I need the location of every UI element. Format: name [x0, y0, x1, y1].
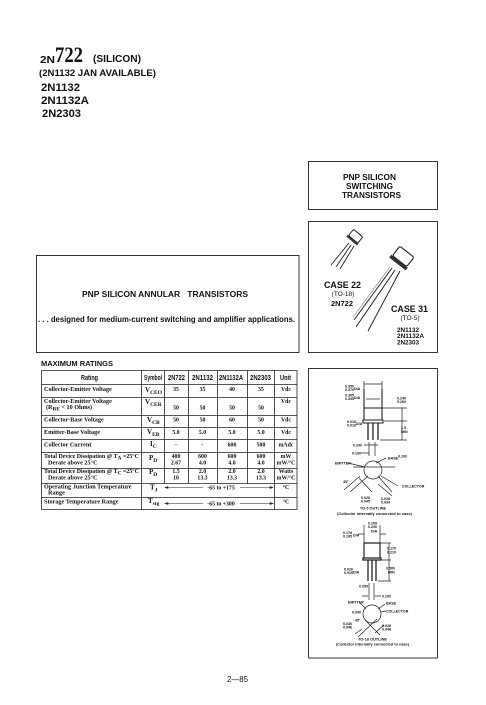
diagram: TO-5 outline: 0.019 — [347, 424, 356, 428]
row: collector-emitter voltage: V — [145, 386, 150, 394]
label: case 22: (TO-18) — [332, 291, 354, 298]
title: part numbers — [39, 42, 156, 120]
row: collector-emitter voltage RBE: 50 — [200, 406, 206, 412]
row: collector-emitter voltage RBE: 50 — [258, 406, 264, 412]
row: storage temperature range: stg — [153, 501, 160, 507]
row: device dissipation TC: =25°C — [122, 468, 139, 475]
label: case 22: CASE 22 — [324, 280, 361, 291]
row: collector current — [44, 440, 294, 450]
row: emitter-base voltage: Emitter-Base Voltage — [44, 429, 100, 436]
diagram: TO-18 outline: 0.036 — [343, 622, 352, 626]
diagram: TO-18 outline: 0.048 — [382, 628, 391, 632]
table header: 2N722 — [168, 375, 185, 382]
row: collector-base voltage: 60 — [229, 418, 235, 424]
page number: 2—85 — [227, 674, 248, 684]
diagram: TO-18 outline: 0.019 — [344, 571, 353, 575]
row: device dissipation TA: 600 — [228, 454, 236, 460]
row: collector-emitter voltage RBE — [44, 398, 291, 412]
panel: device description: . . . designed for medium-current switching and amplifier applications. — [38, 315, 295, 324]
row: emitter-base voltage: Vdc — [281, 430, 291, 436]
diagram: TO-18 outline: 0.040 — [352, 610, 361, 614]
table header: Symbol — [144, 375, 162, 382]
panel: device description: PNP SILICON ANNULAR TRANSISTORS — [82, 290, 248, 299]
label: case 31: CASE 31 — [391, 304, 429, 315]
panel: PNP silicon switching transistors: SWITCHING — [346, 182, 393, 191]
title: part numbers: 2N2303 — [42, 108, 81, 120]
row: device dissipation TA: D — [153, 458, 157, 464]
heading: maximum ratings: MAXIMUM RATINGS — [41, 361, 113, 368]
row: collector current: - — [202, 442, 204, 448]
label: case 31: 2N1132A — [397, 334, 425, 340]
row: operating junction temperature — [44, 484, 289, 496]
label: case 31 — [391, 304, 429, 346]
row: device dissipation TC: Total Device Dissipation @ T — [44, 469, 117, 475]
diagram: TO-18 outline: DIA — [371, 530, 378, 534]
diagram: TO-5 outline: COLLECTOR — [402, 484, 425, 488]
row: device dissipation TA: Derate above 25°C — [48, 460, 98, 466]
row: collector current: - — [175, 442, 177, 448]
label: case 31: 2N1132 — [397, 328, 420, 334]
row: device dissipation TA: P — [149, 454, 153, 462]
diagram: TO-5 outline: DIA — [354, 396, 361, 400]
diagram: TO-18 outline: 0.050 — [359, 584, 368, 588]
row: device dissipation TC — [44, 468, 295, 482]
row: operating junction temperature: -65 to +175 — [207, 486, 235, 492]
diagram: TO-18 outline: 45° — [355, 618, 361, 622]
caption: TO-5 outline — [337, 506, 413, 516]
row: collector-emitter voltage RBE: 50 — [173, 406, 179, 412]
row: device dissipation TC: 2.0 — [199, 469, 206, 475]
diagram: TO-5 outline: 0.240 — [397, 396, 406, 400]
table header: Rating — [81, 375, 98, 382]
row: collector-emitter voltage: Vdc — [281, 387, 291, 393]
diagram: TO-18 outline: MIN — [388, 570, 395, 574]
row: device dissipation TC: Watts — [279, 469, 294, 475]
table header: 2N1132 — [192, 375, 213, 382]
row: collector current: mAdc — [279, 442, 294, 448]
table header: 2N1132A — [219, 375, 243, 382]
row: collector-emitter voltage RBE: Vdc — [281, 399, 291, 405]
row: emitter-base voltage: 5.0 — [228, 430, 236, 436]
table grid — [42, 370, 297, 510]
row: emitter-base voltage: V — [147, 428, 152, 436]
diagram: TO-5 outline: 0.305 — [345, 394, 354, 398]
diagram: TO-5 outline: DIA — [354, 387, 361, 391]
title: part numbers: (SILICON) — [93, 54, 141, 65]
row: emitter-base voltage: 5.0 — [172, 430, 180, 436]
title: part numbers: 722 — [55, 42, 83, 67]
diagram: TO-5 outline: 45° — [343, 480, 349, 484]
diagram: TO-18 outline: BASE — [386, 602, 397, 606]
title: part numbers: (2N1132 JAN AVAILABLE) — [39, 68, 156, 79]
diagram: TO-5 outline: 0.028 — [381, 497, 390, 501]
diagram: TO-18 outline: 0.046 — [343, 626, 352, 630]
row: operating junction temperature: °C — [283, 484, 289, 491]
row: operating junction temperature: Operating Junction Temperature — [44, 484, 132, 490]
row: collector-base voltage: 50 — [258, 418, 264, 424]
row: collector-emitter voltage: 35 — [173, 387, 179, 393]
label: case 31: 2N2303 — [397, 340, 420, 346]
row: collector-base voltage: Vdc — [281, 418, 291, 424]
caption: TO-18 outline: (Collector internally connected to case) — [336, 642, 410, 646]
row: device dissipation TC: 2.0 — [228, 469, 236, 475]
row: collector-emitter voltage RBE: < 10 Ohms) — [60, 404, 92, 411]
row: emitter-base voltage: 5.0 — [199, 430, 206, 436]
diagram: TO-5 outline: 0.029 — [361, 496, 370, 500]
diagram: TO-5 outline: 0.016 — [347, 420, 356, 424]
row: operating junction temperature: J — [155, 488, 158, 494]
diagram: TO-5 outline: 0.100 — [352, 452, 361, 456]
diagram: TO-5 outline: DIA — [356, 422, 363, 426]
diagram: TO-5 outline: 0.200 — [353, 444, 362, 448]
row: collector-base voltage: CB — [152, 420, 160, 426]
row: collector-base voltage — [44, 416, 291, 426]
diagram: TO-18 outline: 0.178 — [343, 531, 352, 535]
label: case 22: 2N722 — [331, 301, 353, 308]
table header: 2N2303 — [250, 375, 271, 382]
panel: device description — [36, 256, 299, 352]
diagram: TO-18 outline: EMITTER — [348, 600, 364, 604]
label: case 22 — [324, 280, 361, 308]
row: collector current: I — [150, 440, 153, 448]
row: device dissipation TA — [44, 453, 295, 466]
diagram: TO-5 outline: 0.100 — [398, 454, 407, 458]
row: emitter-base voltage: 5.0 — [257, 430, 265, 436]
diagram: TO-18 outline: COLLECTOR — [386, 610, 409, 614]
caption: TO-18 outline: TO-18 OUTLINE — [358, 636, 387, 642]
row: device dissipation TA: 600 — [257, 454, 265, 460]
row: device dissipation TC: 10 — [173, 476, 179, 482]
diagram: TO-5 outline: 0.045 — [361, 500, 370, 504]
row: collector-emitter voltage — [44, 386, 291, 396]
diagram: TO-18 outline: 0.230 — [368, 525, 377, 529]
diagram: TO-18 outline: DIA — [353, 534, 360, 538]
diagram: TO-5 outline: MIN — [401, 430, 408, 434]
panel: outline drawings — [308, 368, 438, 658]
panel: PNP silicon switching transistors: PNP SILICON — [343, 173, 396, 182]
row: collector-emitter voltage: 40 — [229, 387, 235, 393]
row: collector-emitter voltage: CEO — [150, 390, 163, 396]
diagram: TO-5 outline: 1.5 — [401, 426, 406, 430]
diagram: TO-5 outline: EMITTER — [335, 462, 351, 466]
diagram: TO-18 outline — [336, 522, 410, 646]
row: device dissipation TC: 13.3 — [197, 476, 208, 482]
title: part numbers: 2N1132A — [41, 95, 89, 107]
row: device dissipation TC: mW/°C — [277, 474, 295, 482]
row: collector-emitter voltage RBE: CER — [150, 402, 163, 408]
diagram: TO-18 outline: 0.210 — [387, 550, 396, 554]
row: operating junction temperature: T — [150, 484, 155, 492]
row: device dissipation TC: 13.3 — [256, 476, 266, 482]
diagram: TO-5 outline: 0.034 — [381, 500, 390, 504]
title: part numbers: 2N1132 — [41, 82, 80, 94]
row: collector-emitter voltage: 35 — [258, 387, 264, 393]
row: storage temperature range: Storage Temperature Range — [44, 498, 119, 506]
row: storage temperature range: T — [148, 497, 153, 505]
diagram: TO-18 outline: 0.195 — [343, 534, 352, 538]
row: device dissipation TA: 4.0 — [228, 460, 236, 466]
label: case 31: (TO-5) — [400, 315, 420, 322]
diagram: TO-5 outline: 0.260 — [397, 400, 406, 404]
row: collector-emitter voltage RBE: (R — [46, 404, 53, 411]
row: collector-base voltage: 50 — [173, 418, 179, 424]
row: collector-emitter voltage RBE: V — [145, 398, 150, 406]
panel: PNP silicon switching transistors: TRANSISTORS — [342, 191, 401, 200]
row: device dissipation TC: 13.3 — [227, 476, 237, 482]
row: device dissipation TC: Derate above 25°C — [48, 474, 98, 482]
row: collector-base voltage: Collector-Base Voltage — [44, 416, 104, 424]
row: collector-base voltage: 50 — [200, 418, 206, 424]
row: device dissipation TC: P — [149, 468, 153, 476]
row: collector-base voltage: V — [147, 416, 152, 424]
row: device dissipation TA: =25°C — [122, 453, 139, 460]
row: collector-emitter voltage RBE: 50 — [229, 406, 235, 412]
diagram: TO-5 outline — [335, 381, 425, 516]
row: collector current: 600 — [228, 442, 236, 448]
diagram: TO-18 outline: 0.028 — [382, 624, 391, 628]
title: part numbers: 2N — [40, 54, 55, 66]
row: storage temperature range: -65 to +300 — [207, 502, 235, 508]
diagram: TO-18 outline: 0.016 — [344, 568, 353, 572]
caption: TO-5 outline: (Collector internally connected to case) — [337, 511, 413, 516]
row: collector current: C — [153, 444, 157, 450]
row: device dissipation TA: 600 — [198, 454, 207, 460]
row: device dissipation TA: mW — [281, 454, 292, 460]
icon: small TO-18 transistor — [331, 229, 364, 269]
panel: case packages — [308, 222, 438, 352]
row: device dissipation TC: D — [153, 472, 157, 478]
diagram: TO-18 outline: DIA — [353, 570, 360, 574]
row: collector-emitter voltage: Collector-Emitter Voltage — [44, 386, 112, 393]
row: storage temperature range — [44, 497, 289, 508]
row: operating junction temperature: Range — [48, 490, 65, 496]
row: emitter-base voltage — [44, 428, 291, 438]
panel: PNP silicon switching transistors — [308, 162, 438, 210]
table header — [81, 375, 292, 382]
diagram: TO-5 outline: 0.370 — [345, 388, 354, 392]
row: storage temperature range: °C — [283, 498, 289, 506]
row: collector-emitter voltage: 35 — [200, 387, 206, 393]
row: device dissipation TA: mW/°C — [277, 460, 295, 466]
row: device dissipation TA: A — [117, 456, 122, 462]
row: device dissipation TA: 4.0 — [199, 460, 206, 466]
row: device dissipation TA: 2.67 — [171, 460, 181, 466]
diagram: TO-18 outline: 0.100 — [382, 594, 391, 598]
row: device dissipation TA: 4.0 — [257, 460, 265, 466]
row: device dissipation TC: 1.5 — [172, 469, 180, 475]
row: emitter-base voltage: EB — [152, 432, 160, 438]
row: device dissipation TC: C — [117, 470, 122, 476]
diagram: TO-5 outline: 0.350 — [345, 384, 354, 388]
diagram: TO-5 outline: BASE — [388, 456, 399, 460]
diagram: TO-18 outline: 0.500 — [386, 566, 395, 570]
diagram: TO-5 outline: 0.335 — [345, 397, 354, 401]
row: collector current: 500 — [257, 442, 265, 448]
diagram: TO-18 outline: 0.170 — [387, 546, 396, 550]
table header: Unit — [280, 375, 292, 382]
row: device dissipation TA: 400 — [172, 454, 180, 460]
row: collector-emitter voltage RBE: BE — [53, 406, 60, 412]
row: device dissipation TC: 2.0 — [257, 469, 265, 475]
caption: TO-18 outline — [336, 636, 410, 646]
row: collector-emitter voltage RBE: Collector-Emitter Voltage — [44, 398, 112, 405]
row: device dissipation TA: Total Device Dissipation @ T — [44, 454, 117, 460]
row: collector current: Collector Current — [44, 442, 92, 448]
icon: large TO-5 transistor — [353, 245, 415, 331]
caption: TO-5 outline: TO-5 OUTLINE — [360, 506, 386, 510]
diagram: TO-18 outline: 0.209 — [368, 522, 377, 526]
table: maximum ratings — [42, 370, 297, 510]
